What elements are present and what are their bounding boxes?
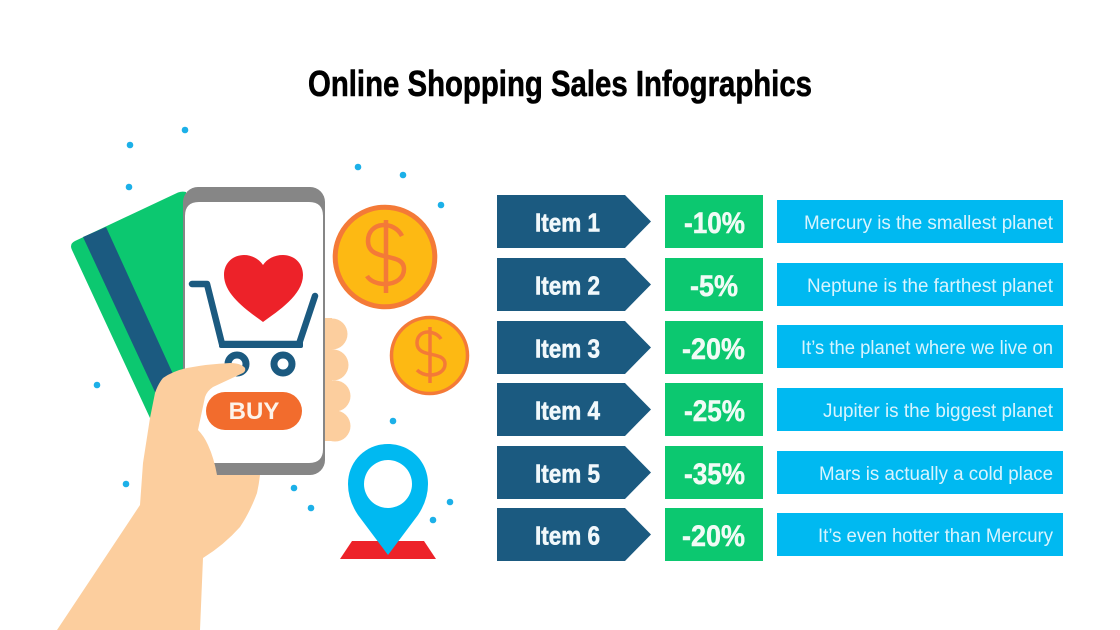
arrow label: Item 3	[497, 321, 651, 374]
arrow label: Item 1: Item 1	[535, 208, 600, 238]
table row: Item 4	[497, 383, 1063, 436]
arrow label: Item 5	[497, 446, 651, 499]
icon: credit card	[71, 192, 186, 418]
icon: location pin	[340, 444, 436, 559]
value: -35%: -35%	[684, 458, 745, 491]
value: -20%: -20%	[682, 333, 745, 366]
button: BUY	[206, 392, 302, 430]
value: -5%: -5%	[690, 270, 738, 303]
description: Neptune	[777, 263, 1063, 306]
table row: Item 6	[497, 508, 1063, 561]
button: BUY: BUY	[229, 398, 279, 425]
value: -10%: -10%	[684, 207, 745, 240]
description: Mercury: Mercury is the smallest planet	[804, 213, 1054, 234]
decorative blue dots	[94, 127, 453, 523]
arrow label: Item 3: Item 3	[535, 334, 600, 364]
description: Mars	[777, 451, 1063, 494]
icon: large dollar coin	[335, 207, 435, 307]
arrow label: Item 4: Item 4	[535, 396, 600, 426]
description: Jupiter	[777, 388, 1063, 431]
table row: Item 1	[497, 195, 1063, 248]
value: -10%	[665, 195, 763, 248]
description: Mars: Mars is actually a cold place	[819, 464, 1053, 485]
description: Earth	[777, 325, 1063, 368]
arrow label: Item 5: Item 5	[535, 458, 600, 488]
description: Jupiter: Jupiter is the biggest planet	[823, 401, 1054, 422]
icon: smartphone	[183, 187, 325, 475]
title: Online Shopping Sales Infographics	[308, 63, 812, 104]
description: Mercury	[777, 200, 1063, 243]
description: Mercury heat: It’s even hotter than Mercury	[818, 526, 1053, 547]
arrow label: Item 4	[497, 383, 651, 436]
arrow label: Item 6	[497, 508, 651, 561]
table row: Item 2	[497, 258, 1063, 311]
value: -20%: -20%	[682, 520, 745, 553]
icon: shopping cart	[192, 284, 315, 373]
value: -35%	[665, 446, 763, 499]
arrow label: Item 1	[497, 195, 651, 248]
description: Neptune: Neptune is the farthest planet	[807, 276, 1054, 297]
icon: hand holding phone	[57, 363, 260, 630]
arrow label: Item 2	[497, 258, 651, 311]
icon: heart	[224, 255, 303, 322]
icon: fingers behind phone	[316, 318, 350, 442]
description: Mercury heat	[777, 513, 1063, 556]
description: Earth: It’s the planet where we live on	[801, 338, 1053, 359]
value: -20%	[665, 508, 763, 561]
arrow label: Item 6: Item 6	[535, 520, 600, 550]
arrow label: Item 2: Item 2	[535, 270, 600, 300]
value: -5%	[665, 258, 763, 311]
value: -25%	[665, 383, 763, 436]
table row: Item 3	[497, 321, 1063, 374]
illustration: phone shopping scene	[57, 127, 468, 630]
icon: small dollar coin	[392, 318, 468, 394]
value: -25%: -25%	[684, 395, 745, 428]
value: -20%	[665, 321, 763, 374]
table row: Item 5	[497, 446, 1063, 499]
